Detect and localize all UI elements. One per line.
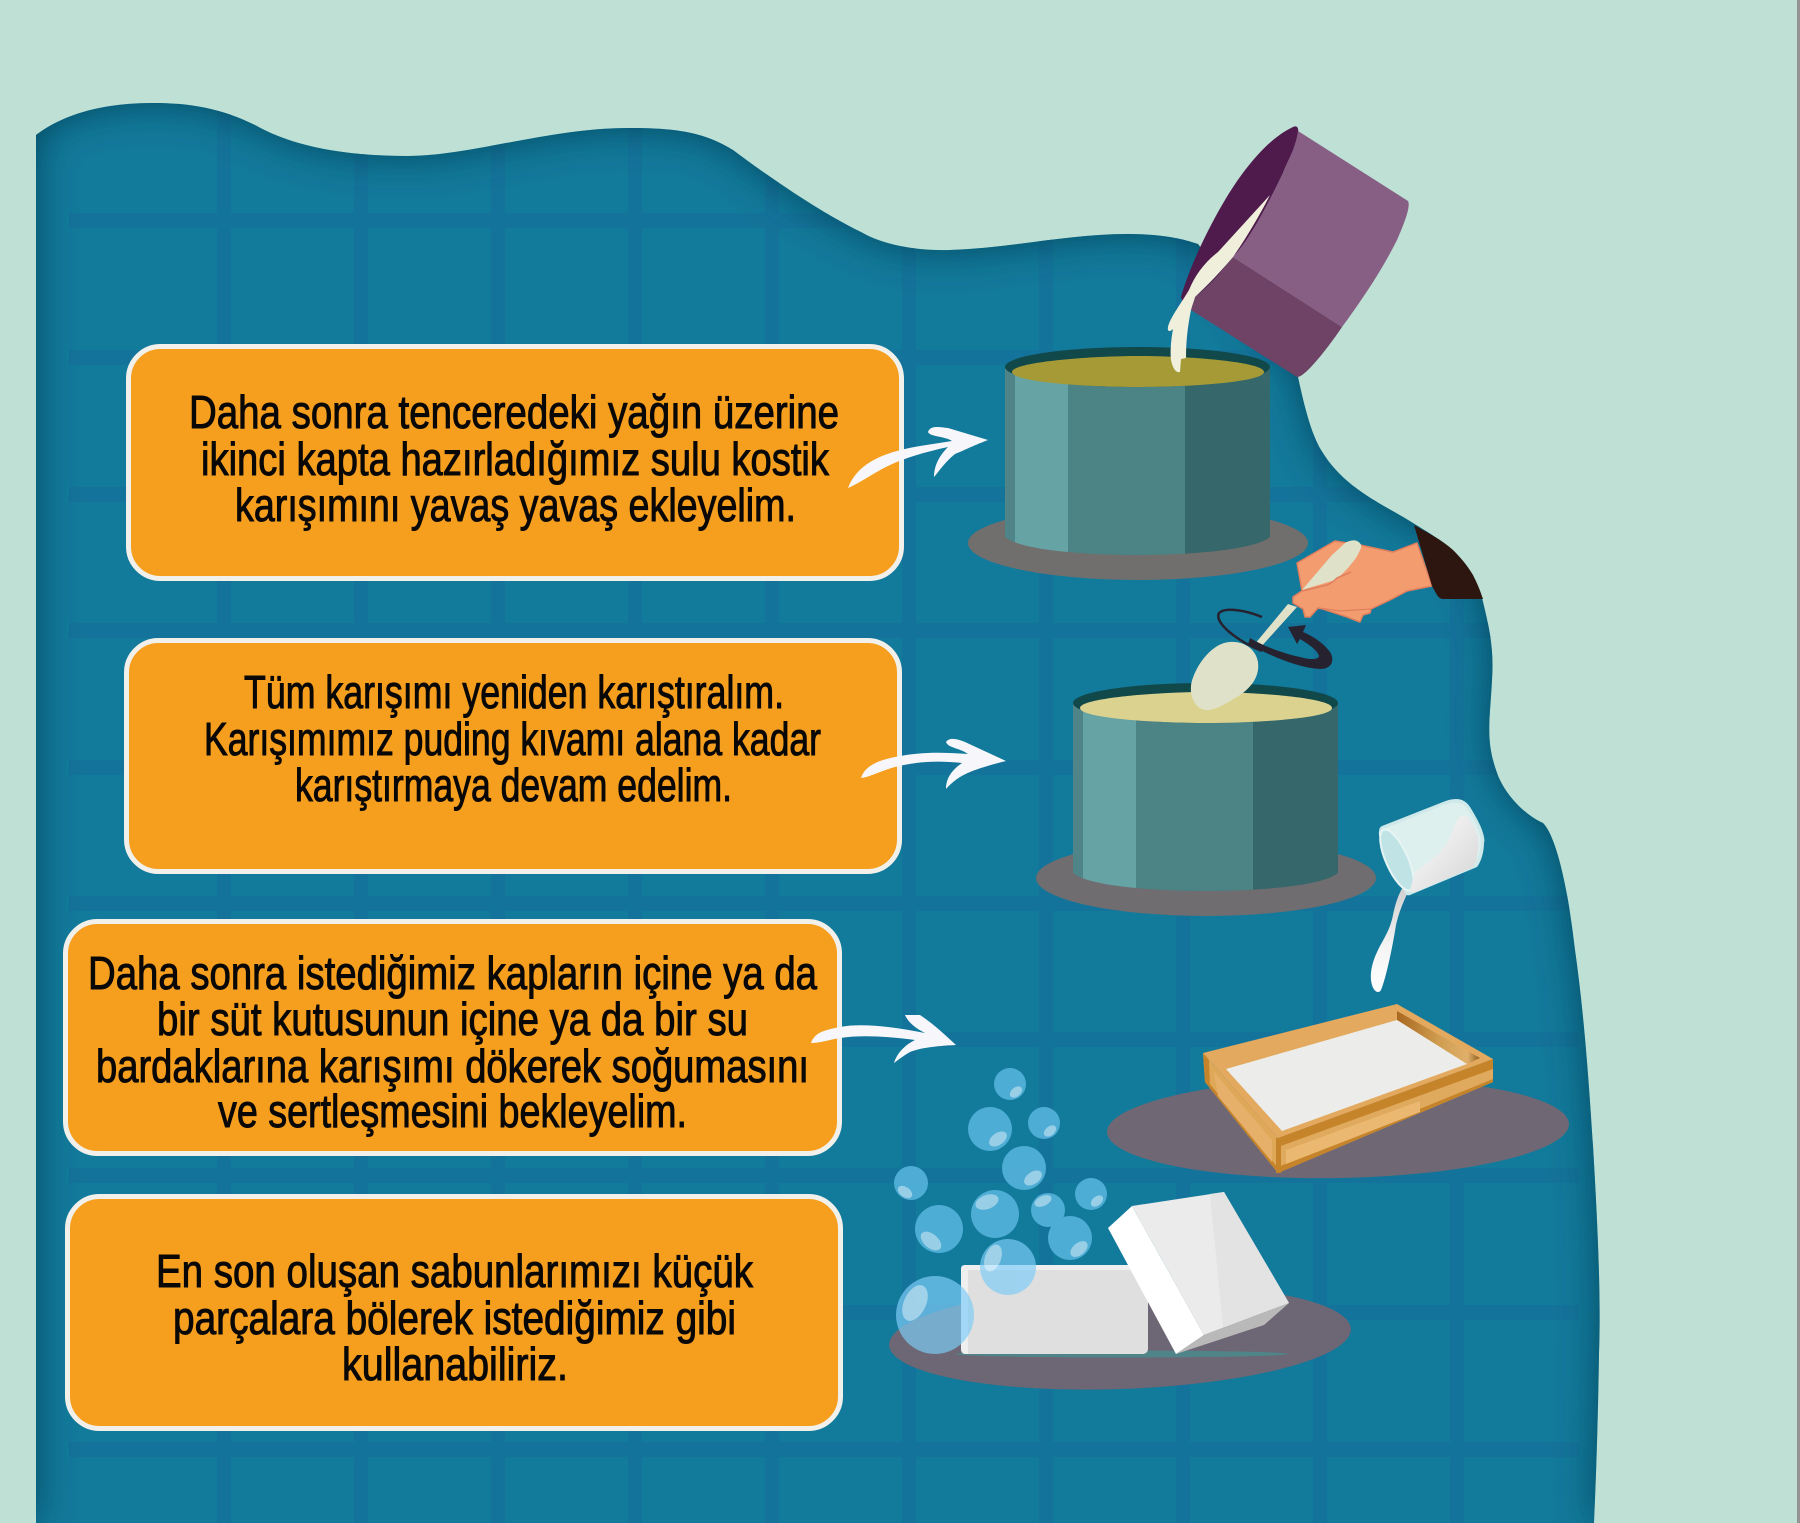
card 3: step text: bardaklarına karışımı dökerek soğumasını (96, 1040, 809, 1092)
card 4: step text: parçalara bölerek istediğimiz gibi (173, 1292, 736, 1344)
card 3: step text (66, 922, 840, 1154)
card 4: step text (68, 1196, 840, 1428)
pot 2 with pudding mixture (1036, 683, 1376, 916)
glass cup (1374, 799, 1484, 895)
soap mould tray (1106, 1004, 1570, 1182)
card 3: step text: ve sertleşmesini bekleyelim. (218, 1085, 687, 1137)
card 1: step text: karışımını yavaş yavaş ekleyelim. (235, 479, 796, 531)
card 1: step text: Daha sonra tenceredeki yağın üzerine (189, 386, 839, 438)
purple pouring pot (1181, 126, 1409, 377)
card 4: step text: En son oluşan sabunlarımızı küçük (156, 1245, 754, 1297)
card 2: step text: Karışımımız puding kıvamı alana kadar (204, 713, 821, 765)
arrow 1 (848, 427, 988, 488)
card 1: step text (128, 346, 902, 578)
stirring rotation arrow, back part (1218, 610, 1262, 651)
arrow 3 (811, 1015, 956, 1063)
stirring rotation arrow, front part (1248, 625, 1332, 669)
card 2: step text (126, 640, 900, 872)
spoon (1191, 604, 1297, 710)
soap bars (887, 1192, 1353, 1397)
pouring liquid stream (1168, 195, 1270, 372)
card 2: step text: karıştırmaya devam edelim. (295, 759, 732, 811)
card 4: step text: kullanabiliriz. (342, 1338, 568, 1390)
page edge strip (1797, 0, 1800, 1523)
sleeve (1414, 525, 1483, 599)
soap bubbles (894, 1068, 1107, 1354)
milk stream from cup (1371, 878, 1413, 992)
card 2: step text: Tüm karışımı yeniden karıştıralım. (244, 666, 784, 718)
card 1: step text: ikinci kapta hazırladığımız sulu kostik (201, 433, 830, 485)
card 3: step text: Daha sonra istediğimiz kapların içine ya da (88, 947, 817, 999)
hand holding spoon (1293, 540, 1432, 622)
card 3: step text: bir süt kutusunun içine ya da bir su (157, 993, 748, 1045)
pot 1 with oil (968, 347, 1308, 580)
arrow 2 (861, 739, 1006, 789)
